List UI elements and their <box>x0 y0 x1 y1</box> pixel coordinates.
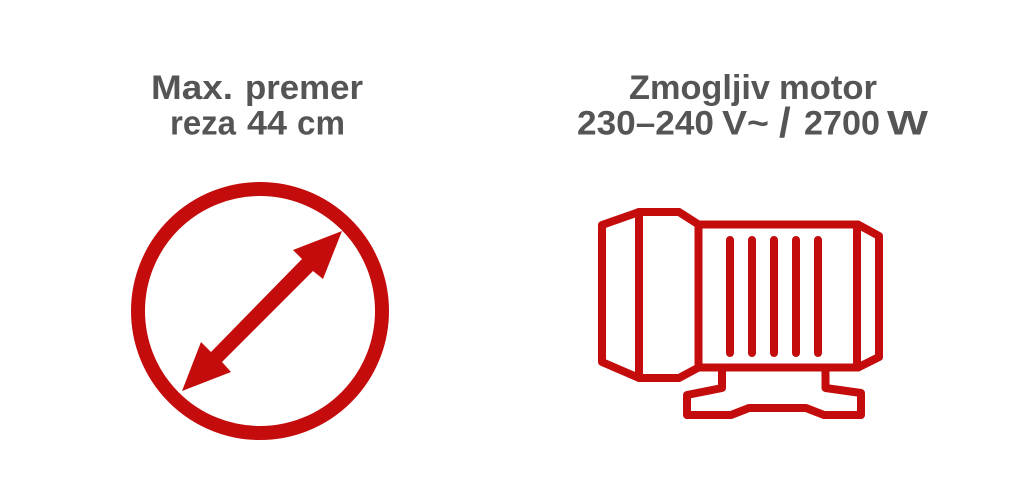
heading: cutting diameter: reza <box>170 104 237 142</box>
heading: powerful motor: 2700 <box>804 104 880 142</box>
heading: powerful motor: / <box>779 99 791 146</box>
icon: electric motor <box>602 212 879 415</box>
heading: powerful motor <box>577 69 929 146</box>
heading: powerful motor: Zmogljiv <box>629 69 770 107</box>
heading: cutting diameter: Max. <box>151 69 233 107</box>
heading: powerful motor: W <box>887 104 929 142</box>
heading: cutting diameter: premer <box>245 69 363 107</box>
heading: powerful motor: motor <box>779 69 877 107</box>
heading: cutting diameter: cm <box>297 104 345 142</box>
heading: cutting diameter: 44 <box>247 104 287 142</box>
heading: powerful motor: 230–240 <box>577 104 714 142</box>
heading: cutting diameter <box>151 69 363 142</box>
icon: circle with diameter arrow <box>138 189 382 433</box>
heading: powerful motor: V~ <box>722 104 769 142</box>
